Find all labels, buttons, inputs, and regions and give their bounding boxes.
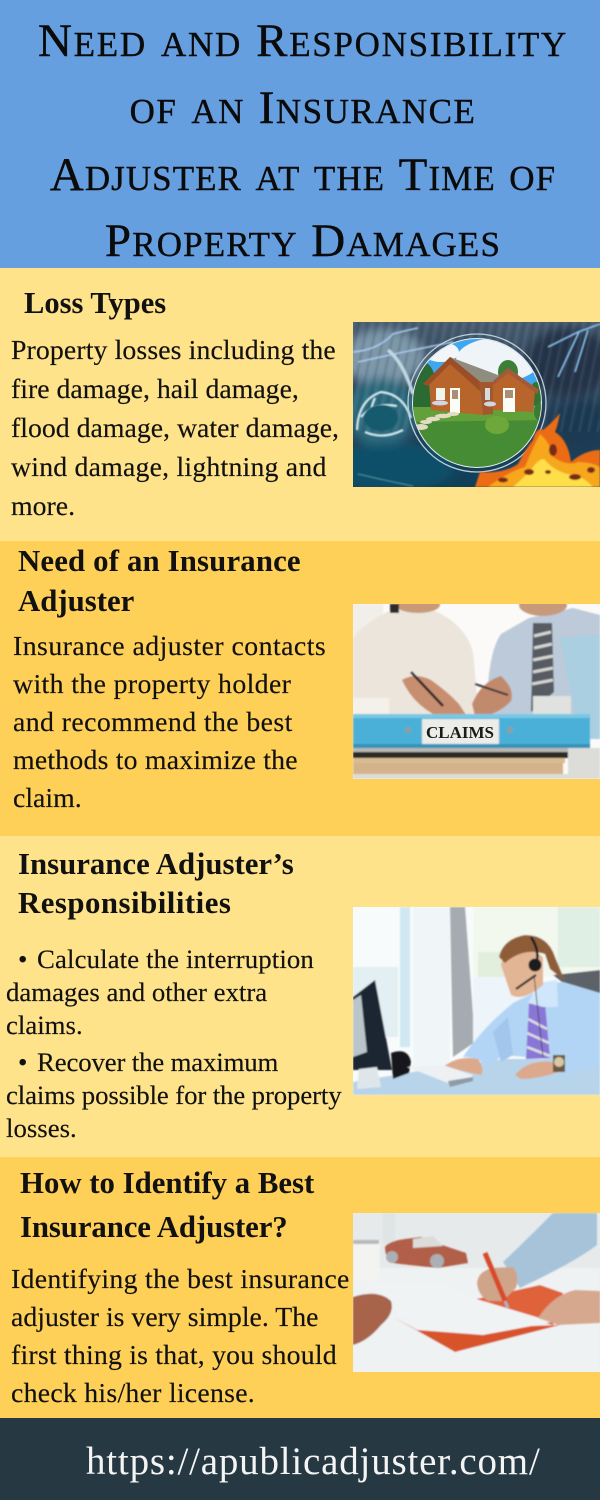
text: responsibilities bullet list: claims. — [6, 1010, 83, 1040]
heading: how to identify a best insurance adjuster: Insurance Adjuster? — [20, 1210, 288, 1244]
text: responsibilities bullet list: • — [18, 944, 27, 974]
heading: insurance adjuster's responsibilities — [18, 847, 294, 920]
text: loss types: fire damage, hail damage, — [11, 374, 299, 405]
text: responsibilities bullet list: damages and other extra — [6, 977, 267, 1007]
heading: need of an insurance adjuster — [18, 544, 301, 618]
panel: need of an insurance adjuster — [0, 541, 600, 836]
heading: need of an insurance adjuster: Adjuster — [18, 584, 134, 618]
footer: website url — [0, 1418, 600, 1500]
panel: loss types — [10, 293, 600, 516]
text: responsibilities bullet list: • — [18, 1047, 27, 1077]
image: hand signing document with toy car — [353, 1213, 600, 1372]
text: loss types: wind damage, lightning and — [11, 452, 327, 483]
text: need of an insurance adjuster: methods to maximize the — [13, 745, 298, 776]
image: claims binder on desk: CLAIMS — [426, 723, 494, 742]
text: how to identify: check his/her license. — [11, 1378, 255, 1409]
title banner: Adjuster at the Time of — [50, 145, 556, 201]
text: need of an insurance adjuster — [12, 631, 326, 814]
title banner: Property Damages — [105, 211, 501, 267]
heading: how to identify a best insurance adjuster: How to Identify a Best — [20, 1166, 314, 1200]
text: loss types — [10, 335, 339, 522]
heading: how to identify a best insurance adjuster — [20, 1166, 314, 1244]
text: loss types: more. — [11, 491, 75, 522]
title banner: Need and Responsibility — [38, 11, 568, 67]
title banner — [0, 0, 600, 268]
text: need of an insurance adjuster: Insurance adjuster contacts — [13, 631, 326, 662]
heading: insurance adjuster's responsibilities: Responsibilities — [18, 886, 231, 920]
image: claims binder on desk — [353, 604, 600, 779]
footer: website url: https://apublicadjuster.com/ — [86, 1440, 541, 1483]
heading: need of an insurance adjuster: Need of an Insurance — [18, 544, 301, 578]
text: responsibilities bullet list: claims possible for the property — [6, 1080, 342, 1110]
heading: loss types: Loss Types — [24, 286, 166, 320]
text: how to identify — [11, 1264, 350, 1409]
text: how to identify: adjuster is very simple. The — [11, 1302, 319, 1333]
image: house surrounded by storm, flood and fire — [353, 322, 600, 487]
title banner: of an Insurance — [130, 78, 476, 134]
text: loss types: flood damage, water damage, — [11, 413, 339, 444]
image: adjuster with headset at computer — [353, 907, 600, 1095]
text: how to identify: Identifying the best insurance — [11, 1264, 350, 1295]
text: how to identify: first thing is that, you should — [11, 1340, 337, 1371]
text: responsibilities bullet list: Calculate the interruption — [37, 944, 314, 974]
text: need of an insurance adjuster: with the property holder — [13, 669, 291, 700]
panel: insurance adjuster's responsibilities — [0, 836, 600, 1157]
panel: how to identify a best insurance adjuster — [0, 1157, 600, 1418]
text: need of an insurance adjuster: claim. — [13, 783, 82, 814]
heading: insurance adjuster's responsibilities: Insurance Adjuster’s — [18, 847, 294, 881]
text: responsibilities bullet list: losses. — [6, 1113, 77, 1143]
text: responsibilities bullet list — [6, 944, 342, 1143]
text: responsibilities bullet list: Recover the maximum — [37, 1047, 278, 1077]
text: loss types: Property losses including the — [11, 335, 336, 366]
text: need of an insurance adjuster: and recommend the best — [13, 707, 293, 738]
